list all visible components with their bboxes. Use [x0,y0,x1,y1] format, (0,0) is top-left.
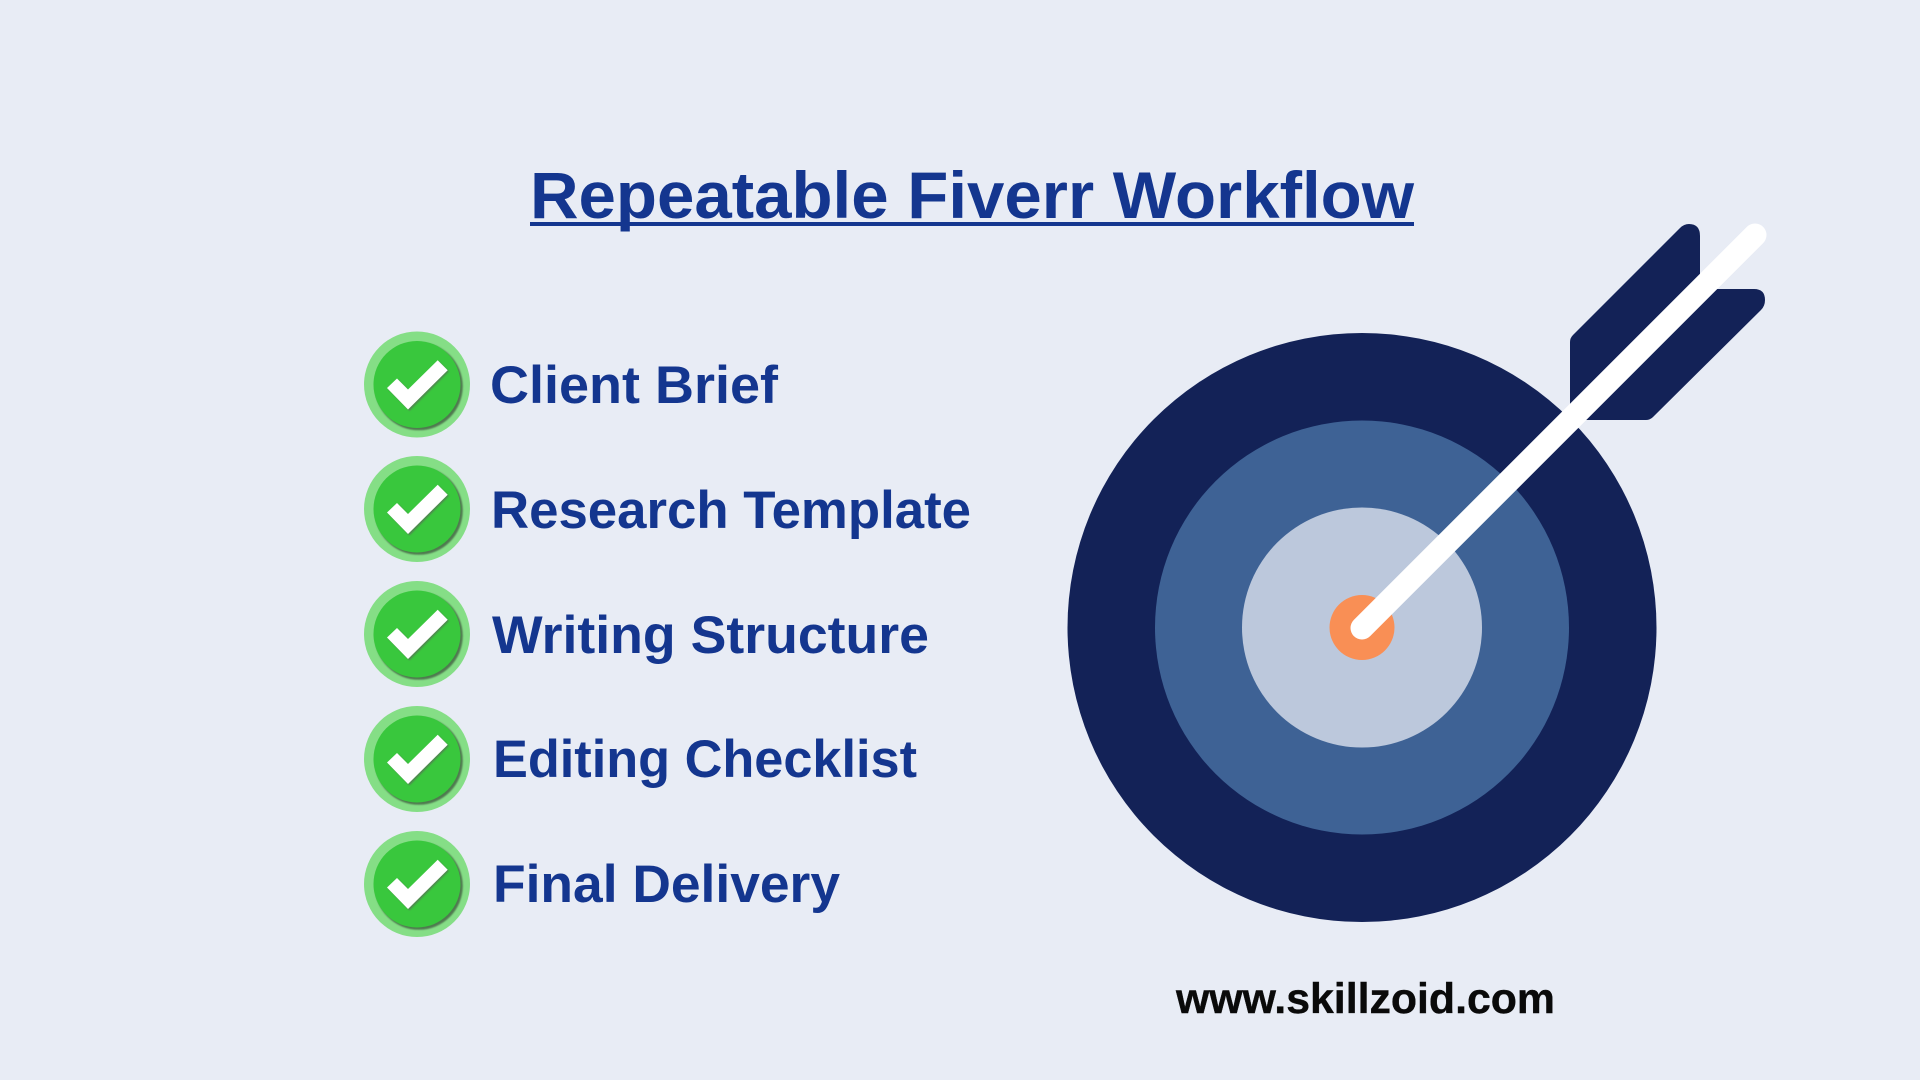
item: Final Delivery: Final Delivery [493,855,841,914]
checklist [364,332,971,937]
item: Editing Checklist [364,706,917,812]
icon: target with arrow [1068,224,1765,922]
item: Writing Structure [364,581,929,687]
item: Research Template: Research Template [491,481,971,540]
arrow shaft [1362,235,1755,628]
item: Writing Structure: Writing Structure [492,606,929,665]
item: Research Template [364,456,971,562]
title: Repeatable Fiverr Workflow [530,158,1415,232]
item: Client Brief [364,332,778,438]
website url: www.skillzoid.com [1175,975,1555,1023]
target rings [1068,333,1656,922]
item: Client Brief: Client Brief [490,356,778,415]
item: Final Delivery [364,831,841,937]
arrow fletching [1570,224,1765,420]
item: Editing Checklist: Editing Checklist [493,730,917,789]
